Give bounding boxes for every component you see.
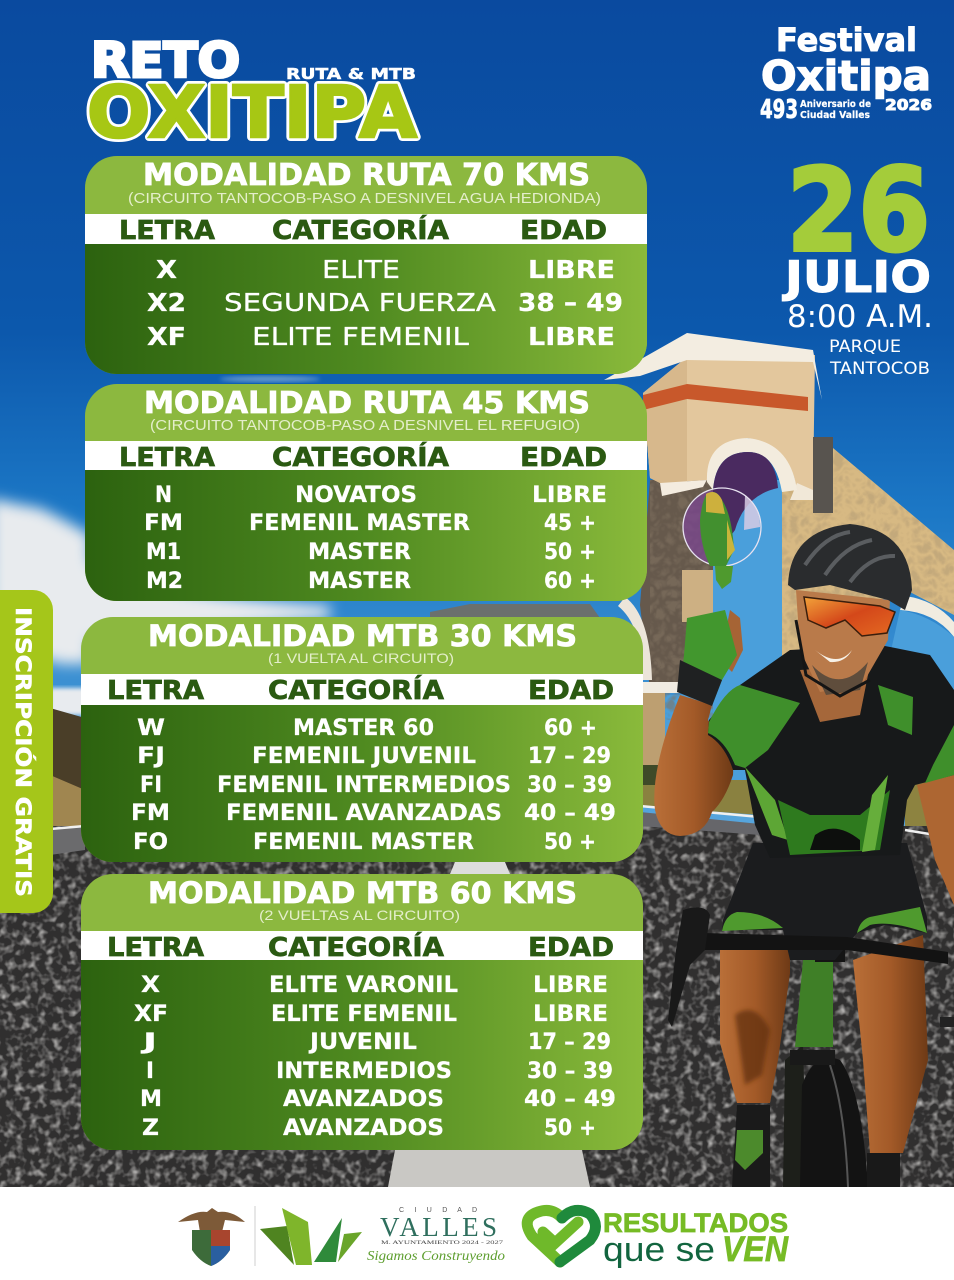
route note: (CIRCUITO TANTOCOB-PASO A DESNIVEL AGUA HEDIONDA) xyxy=(128,190,601,207)
panel: modalidad mtb 30 kms xyxy=(81,617,643,862)
table rows xyxy=(144,483,607,594)
lower arches xyxy=(618,596,954,765)
logo: Ciudad Valles: M. AYUNTAMIENTO 2024 - 2027 xyxy=(381,1240,503,1246)
table rows: 40 – 49 xyxy=(524,1087,616,1112)
date number: 26 xyxy=(787,144,930,277)
panel: modalidad mtb 60 kms xyxy=(81,874,643,1150)
column headers: EDAD xyxy=(528,933,614,963)
logo: Festival Oxitipa 2026 xyxy=(760,21,932,125)
logo: Ciudad Valles xyxy=(255,1206,505,1266)
table rows: 50 + xyxy=(544,540,596,565)
column headers: EDAD xyxy=(520,443,607,473)
column headers: LETRA xyxy=(119,443,215,473)
table rows: FM xyxy=(131,801,170,826)
title word RETO: RETO xyxy=(91,33,240,89)
table rows: LIBRE xyxy=(528,255,615,284)
table rows: FEMENIL INTERMEDIOS xyxy=(217,773,511,798)
table rows: FEMENIL MASTER xyxy=(249,511,470,536)
table rows: ELITE xyxy=(322,255,400,284)
month: JULIO xyxy=(782,252,931,303)
logo: Festival Oxitipa 2026: Oxitipa xyxy=(761,52,931,100)
panel: modalidad ruta 45 kms xyxy=(85,384,647,601)
cyclist arms xyxy=(654,695,954,905)
table rows: XF xyxy=(147,322,186,351)
column headers: EDAD xyxy=(528,676,614,706)
table rows: FJ xyxy=(137,744,165,769)
table rows: 45 + xyxy=(544,511,596,536)
table rows: FEMENIL MASTER xyxy=(253,830,474,855)
cyclist handlebar xyxy=(668,907,954,1027)
table rows: AVANZADOS xyxy=(283,1087,444,1112)
panel: modalidad ruta 70 kms xyxy=(85,156,647,374)
column headers: EDAD xyxy=(520,216,607,246)
route note: (CIRCUITO TANTOCOB-PASO A DESNIVEL EL REFUGIO) xyxy=(150,417,580,434)
leaves emblem xyxy=(260,1208,362,1265)
title: Reto Oxitipa xyxy=(87,33,417,154)
table rows: LIBRE xyxy=(528,322,615,351)
footer band with logos xyxy=(0,1187,954,1280)
table rows: FI xyxy=(140,773,162,798)
column headers: LETRA xyxy=(107,933,204,963)
table rows xyxy=(134,973,616,1141)
logo: Ciudad Valles: C I U D A D xyxy=(399,1207,477,1214)
column headers: LETRA xyxy=(107,676,204,706)
table rows: 40 – 49 xyxy=(524,801,616,826)
place: PARQUE xyxy=(829,337,901,357)
heart check icon xyxy=(527,1210,596,1262)
logo: resultados que se ven: VEN xyxy=(722,1230,789,1269)
logo: resultados que se ven xyxy=(527,1208,789,1269)
table rows: 30 – 39 xyxy=(527,773,612,798)
table rows: AVANZADOS xyxy=(283,1116,444,1141)
column headers: CATEGORÍA xyxy=(268,931,444,963)
column headers xyxy=(107,674,614,706)
column headers: CATEGORÍA xyxy=(272,441,449,473)
logo: Festival Oxitipa 2026: Ciudad Valles xyxy=(800,110,870,121)
time: 8:00 A.M. xyxy=(787,299,933,335)
table rows: MASTER xyxy=(308,540,411,565)
arch curve and opening xyxy=(707,438,797,560)
column headers: LETRA xyxy=(119,216,215,246)
place: TANTOCOB xyxy=(829,359,930,379)
cyclist bike wheel and frame xyxy=(783,900,868,1187)
logo: coat of arms xyxy=(178,1208,245,1266)
table rows: LIBRE xyxy=(533,973,608,998)
heading: MODALIDAD RUTA 45 KMS xyxy=(144,386,590,421)
illustration: stone arch monument with parrot xyxy=(604,333,954,780)
table rows: NOVATOS xyxy=(295,483,417,508)
table rows: ELITE FEMENIL xyxy=(252,322,469,351)
left stone pillar xyxy=(640,480,713,720)
logo: Ciudad Valles: VALLES xyxy=(380,1212,497,1242)
cyclist jersey xyxy=(708,645,954,858)
logo: Festival Oxitipa 2026: 2026 xyxy=(885,96,932,114)
table rows: MASTER 60 xyxy=(293,716,434,741)
table rows: N xyxy=(155,483,172,508)
route note: (2 VUELTAS AL CIRCUITO) xyxy=(259,907,460,923)
title word OXITIPA: OXITIPA xyxy=(87,71,417,154)
table rows: FEMENIL AVANZADAS xyxy=(226,801,502,826)
heading: MODALIDAD RUTA 70 KMS xyxy=(143,158,590,193)
logo: resultados que se ven: RESULTADOS xyxy=(603,1208,788,1238)
sky opening under arch xyxy=(665,480,782,780)
column headers xyxy=(119,214,607,246)
table rows: M xyxy=(140,1087,162,1112)
table rows xyxy=(131,716,616,855)
side tab: inscripción gratis xyxy=(0,590,53,913)
tower xyxy=(604,333,833,513)
heading: MODALIDAD MTB 30 KMS xyxy=(148,619,577,653)
table rows: 38 – 49 xyxy=(518,288,623,317)
table rows: JUVENIL xyxy=(308,1030,417,1055)
table rows: FEMENIL JUVENIL xyxy=(252,744,476,769)
column headers xyxy=(107,931,614,963)
table rows: 60 + xyxy=(544,716,597,741)
cyclist sunglasses xyxy=(804,597,895,636)
parrot lens circle xyxy=(683,488,761,566)
table rows: SEGUNDA FUERZA xyxy=(224,288,496,317)
table rows: ELITE FEMENIL xyxy=(271,1002,457,1027)
logo: Festival Oxitipa 2026: Festival xyxy=(776,21,917,59)
column headers xyxy=(119,441,607,473)
table rows: FO xyxy=(133,830,168,855)
table rows: MASTER xyxy=(308,569,411,594)
right masonry wall xyxy=(782,448,954,660)
table rows: 17 – 29 xyxy=(528,744,611,769)
logo: Festival Oxitipa 2026: 493 xyxy=(760,95,798,125)
table rows: XF xyxy=(134,1002,168,1027)
route note: (1 VUELTA AL CIRCUITO) xyxy=(268,650,454,666)
table rows: X xyxy=(141,973,160,998)
table rows: LIBRE xyxy=(532,483,607,508)
table rows: X2 xyxy=(147,288,186,317)
cyclist short leg bands xyxy=(722,907,927,933)
table rows: M1 xyxy=(146,540,181,565)
cyclist shorts xyxy=(722,843,927,960)
parrot xyxy=(700,492,735,589)
cyclist helmet xyxy=(788,524,912,610)
table rows: INTERMEDIOS xyxy=(276,1059,452,1084)
event date and place xyxy=(782,144,933,379)
table rows: W xyxy=(137,716,165,741)
logo: resultados que se ven: que se xyxy=(603,1231,715,1269)
illustration: cyclist xyxy=(654,524,954,1187)
logo: Ciudad Valles: Sigamos Construyendo xyxy=(367,1249,505,1264)
logo: Festival Oxitipa 2026: Aniversario de xyxy=(800,99,871,110)
cyclist neck and head xyxy=(796,590,890,722)
table rows: 30 – 39 xyxy=(527,1059,613,1084)
cyclist glove xyxy=(677,610,743,706)
column headers: CATEGORÍA xyxy=(268,674,444,706)
cyclist legs xyxy=(720,935,928,1187)
column headers: CATEGORÍA xyxy=(272,214,449,246)
table rows: LIBRE xyxy=(533,1002,608,1027)
table rows: 60 + xyxy=(544,569,596,594)
table rows: 50 + xyxy=(544,830,596,855)
table rows: Z xyxy=(142,1116,159,1141)
side tab: inscripción gratis: INSCRIPCIÓN GRATIS xyxy=(11,607,36,897)
table rows xyxy=(147,255,623,351)
table rows: 17 – 29 xyxy=(528,1030,611,1055)
table rows: M2 xyxy=(146,569,183,594)
table rows: FM xyxy=(144,511,183,536)
table rows: X xyxy=(156,255,177,284)
title word OXITIPA: OXITIPA xyxy=(87,71,417,154)
table rows: J xyxy=(140,1030,157,1055)
table rows: I xyxy=(146,1059,154,1084)
table rows: ELITE VARONIL xyxy=(269,973,458,998)
table rows: 50 + xyxy=(544,1116,596,1141)
subtitle Ruta & MTB: RUTA & MTB xyxy=(286,65,416,83)
heading: MODALIDAD MTB 60 KMS xyxy=(148,876,577,910)
